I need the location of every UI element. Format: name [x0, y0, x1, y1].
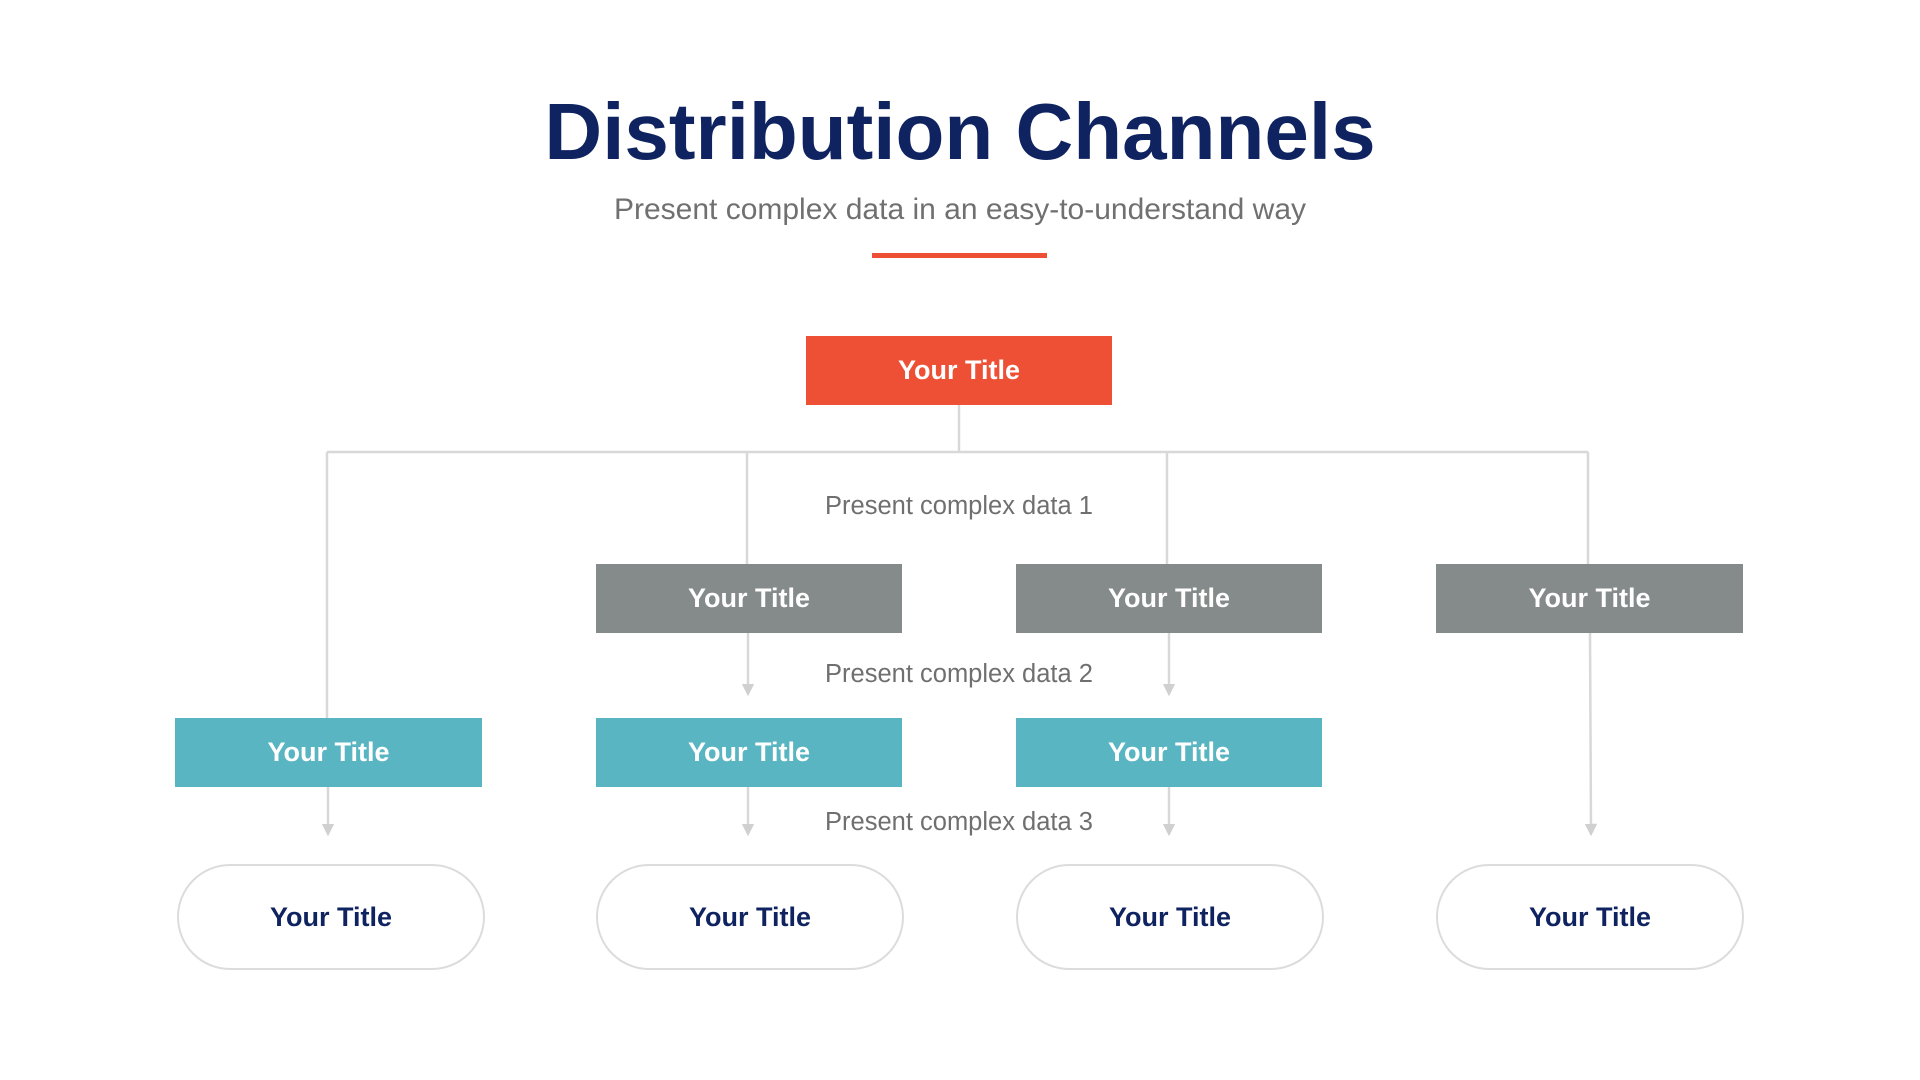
- pill 4: Your Title: [1529, 902, 1651, 932]
- gray box 2: Your Title: [1108, 583, 1230, 613]
- accent line: [872, 253, 1047, 258]
- pill 2: Your Title: [689, 902, 811, 932]
- label 2: Present complex data 2: [825, 660, 1093, 688]
- gray box 2: [1016, 564, 1322, 633]
- pill 4: [1436, 864, 1744, 970]
- label 1: Present complex data 1: [825, 492, 1093, 520]
- title: Distribution Channels: [544, 87, 1376, 176]
- pill 1: Your Title: [270, 902, 392, 932]
- pill 2: [596, 864, 904, 970]
- pill 3: Your Title: [1109, 902, 1231, 932]
- gray box 3: Your Title: [1528, 583, 1650, 613]
- teal box 3: [1016, 718, 1322, 787]
- top box: [806, 336, 1112, 405]
- teal box 2: [596, 718, 902, 787]
- subtitle: Present complex data in an easy-to-understand way: [614, 193, 1306, 226]
- gray box 1: [596, 564, 902, 633]
- teal box 2: Your Title: [688, 737, 810, 767]
- teal box 1: [175, 718, 482, 787]
- label 3: Present complex data 3: [825, 808, 1093, 836]
- top box: Your Title: [898, 355, 1020, 385]
- teal box 1: Your Title: [267, 737, 390, 767]
- pill 3: [1016, 864, 1324, 970]
- gray box 1: Your Title: [688, 583, 810, 613]
- gray box 3: [1436, 564, 1743, 633]
- teal box 3: Your Title: [1108, 737, 1230, 767]
- pill 1: [177, 864, 485, 970]
